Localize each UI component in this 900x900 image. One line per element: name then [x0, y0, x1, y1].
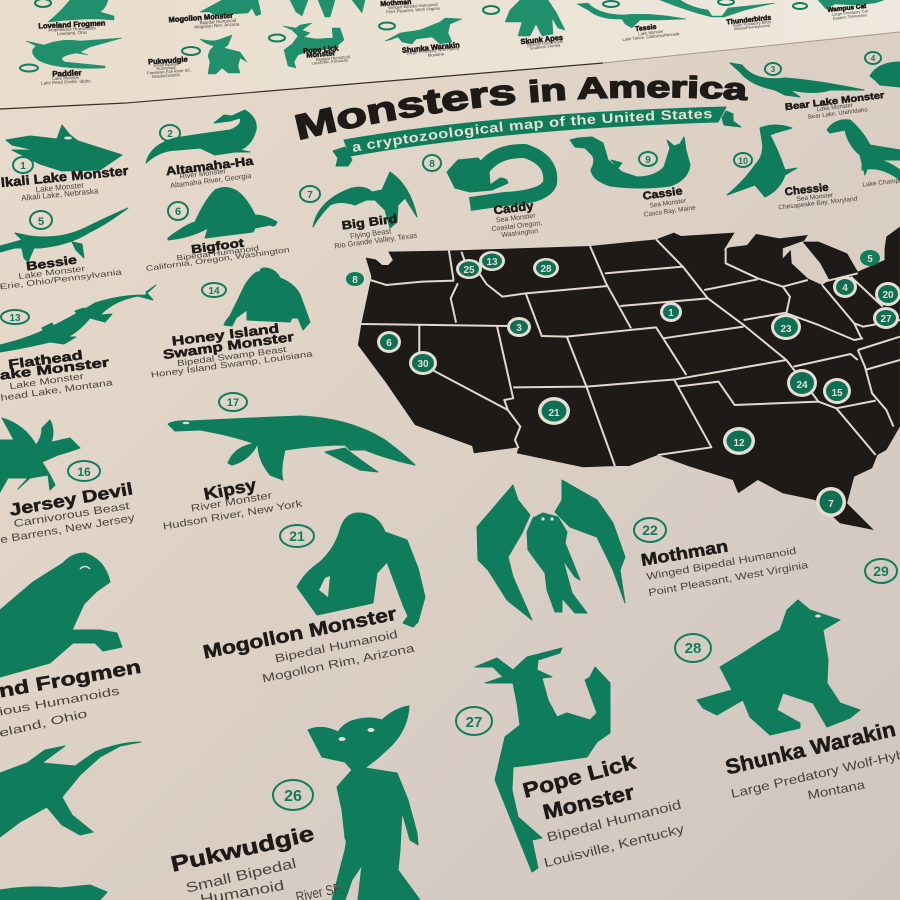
monster 3: Bear Lake Monster: Lake Monster — [816, 103, 853, 113]
title: Monsters in America — [294, 75, 748, 140]
monster: Loveland Frogmen, small — [35, 0, 114, 36]
monster 17: Kipsy: Kipsy — [202, 475, 258, 504]
map markers: 15 — [831, 388, 843, 399]
map markers: 20 — [882, 290, 894, 301]
monster 17: Kipsy: River Monster — [190, 490, 274, 515]
map markers: 3 — [516, 323, 522, 334]
monster 3: Bear Lake Monster: Bear Lake, Utah/Idaho — [808, 107, 869, 121]
monster 7: Big Bird: 7 — [307, 190, 313, 201]
monster 28: Shunka Warakin: Large Predatory Wolf-Hybrid — [730, 743, 900, 801]
monster 27: Pope Lick Monster: Bipedal Humanoid — [545, 797, 683, 845]
monster: Mogollon Monster, small: Bipedal Humanoid — [199, 18, 237, 25]
map markers: 27 — [880, 314, 892, 325]
monster: Pukwudgie, small: Pukwudgie — [148, 55, 188, 66]
map markers: 6 — [386, 338, 392, 349]
monster: Shunka Warakin, small: Montana — [427, 51, 445, 58]
monster 22: Mothman: Mothman — [639, 537, 729, 570]
monster 2: Altamaha-Ha: Altamaha-Ha — [165, 154, 254, 178]
monster 10: Chessie: Chesapeake Bay, Maryland — [778, 195, 858, 211]
monster 26: Pukwudgie: 26 — [284, 788, 302, 805]
map markers: 25 — [463, 265, 475, 276]
monster: Pope Lick Monster, small: Pope Lick — [303, 43, 340, 56]
badge 29: 29 — [873, 563, 889, 579]
monster 25: Paddler — [0, 742, 141, 900]
monster 22: Mothman: Winged Bipedal Humanoid — [646, 546, 797, 583]
map markers: 8 — [352, 275, 358, 286]
monster 1: Alkali Lake Monster: 1 — [20, 161, 26, 172]
monster 20: Loveland Frogmen — [0, 553, 143, 740]
monster 20: Loveland Frogmen: nd Frogmen — [0, 657, 143, 702]
monster: Loveland Frogmen, small: Loveland, Ohio — [57, 30, 88, 36]
monster 3: Bear Lake Monster — [730, 63, 885, 121]
monster 8: Caddy — [423, 151, 550, 239]
monster 14: Honey Island Swamp Monster — [150, 268, 313, 380]
monster 22: Mothman — [477, 480, 810, 620]
monster 17: Kipsy: Hudson River, New York — [162, 498, 304, 533]
monster 26: Pukwudgie: Pukwudgie — [168, 821, 316, 877]
map markers: 7 — [828, 499, 834, 510]
monster 14: Honey Island Swamp Monster: Honey Island Swamp, Louisiana — [150, 348, 313, 380]
monster 9: Cassie: Casco Bay, Maine — [643, 204, 697, 219]
monster: Mogollon Monster, small: Mogollon Monster — [168, 11, 233, 24]
monster 21: Mogollon Monster: Bipedal Humanoid — [274, 629, 399, 665]
monster 1: Alkali Lake Monster: lkali Lake Monster — [0, 163, 129, 190]
monster: Wampus Cat, small: Wampus Cat — [827, 3, 867, 14]
monster 27: Pope Lick Monster: Louisville, Kentucky — [542, 821, 686, 870]
monster 13: Flathead Lake Monster: head Lake, Montana — [0, 377, 113, 403]
monster: Pope Lick Monster, small: Monster — [306, 48, 336, 60]
monster 7: Big Bird: Flying Beast — [350, 226, 393, 241]
monster 10: Chessie: Sea Monster — [796, 192, 834, 203]
map markers: 28 — [540, 264, 552, 275]
monster 13: Flathead Lake Monster: ake Monster — [0, 354, 110, 383]
monster 7: Big Bird: Big Bird — [341, 211, 398, 233]
monster 9: Cassie: Cassie — [642, 185, 683, 203]
map markers: 21 — [548, 408, 560, 419]
monster 8: Caddy: Caddy — [493, 199, 535, 217]
monster: Thunderbirds, small: Giant Predatory Birds — [733, 19, 771, 28]
monster 27: Pope Lick Monster: 27 — [466, 714, 482, 731]
monster: Skunk Apes, small: Bipedal Humanoids — [527, 39, 563, 47]
monster 11: partial serpent and label at right edge — [827, 120, 900, 189]
monster 5: Bessie: Erie, Ohio/Pennsylvania — [0, 267, 123, 291]
monster 2: Altamaha-Ha — [146, 110, 256, 190]
map: United States — [346, 227, 900, 530]
map markers: 23 — [780, 324, 792, 335]
monster 28: Shunka Warakin — [675, 600, 900, 802]
monster 9: Cassie — [570, 137, 697, 219]
monster 5: Bessie: Bessie — [25, 252, 78, 274]
monster 1: Alkali Lake Monster: Lake Monster — [35, 181, 85, 194]
monster: Shunka Warakin, small: Shunka Warakin — [401, 40, 461, 55]
monster 13: Flathead Lake Monster: 13 — [9, 313, 21, 324]
monster 4: partial at right edge — [865, 52, 900, 87]
monster 20: Loveland Frogmen: ious Humanoids — [0, 685, 121, 719]
monster 26: Pukwudgie: Small Bipedal — [184, 855, 298, 896]
monster 10: Chessie — [727, 125, 858, 211]
monster: Pope Lick Monster, small: Bipedal Humanoid — [316, 54, 351, 62]
monster: Paddler, small — [20, 38, 122, 86]
monster 8: Caddy: Coastal Oregon, — [491, 220, 543, 233]
monster 5: Bessie: Lake Monster — [18, 264, 86, 281]
monster: Pope Lick Monster, small: Louisville, Kentucky — [311, 57, 349, 66]
monster 17: Kipsy: 17 — [227, 397, 239, 409]
monster 5: Bessie — [0, 208, 128, 291]
monster 27: Pope Lick Monster — [456, 648, 686, 872]
monster: Pukwudgie, small: Freetown-Fall River SF, — [147, 67, 191, 76]
monster 10: Chessie: 10 — [738, 156, 748, 166]
monster: Wampus Cat, small: Eastern Tennessee — [833, 12, 868, 21]
monster 27: Pope Lick Monster: Monster — [541, 781, 636, 824]
monster: Skunk Apes, small — [483, 0, 565, 51]
monster: Thunderbirds, small: Illinois/Pennsylvania — [734, 23, 771, 31]
monster 21: Mogollon Monster: 21 — [289, 528, 305, 544]
monster: Loveland Frogmen, small: Loveland Frogmen — [38, 18, 106, 31]
monster: Mogollon Monster, small — [168, 0, 261, 30]
monster: Thunderbirds, small: Thunderbirds — [726, 15, 772, 26]
monster: Paddler, small: Lake Monster — [52, 75, 80, 81]
monster 13: Flathead Lake Monster — [0, 285, 156, 403]
monster: Thunderbirds, small — [660, 0, 775, 31]
monster 16: Jersey Devil: Jersey Devil — [8, 479, 134, 520]
monster 16: Jersey Devil: Carnivorous Beast — [13, 500, 130, 530]
monster 17: Kipsy — [162, 393, 415, 533]
banner: subtitle ribbon: a cryptozoological map of the United States — [352, 110, 712, 152]
monster 16: Jersey Devil: e Barrens, New Jersey — [0, 512, 136, 546]
monster 7: Big Bird: Rio Grande Valley, Texas — [334, 231, 418, 250]
map markers: 5 — [867, 254, 873, 265]
monster: Pukwudgie, small: Massachusetts — [152, 72, 180, 79]
monster 1: Alkali Lake Monster: Alkali Lake, Nebraska — [21, 186, 99, 203]
monster 10: Chessie: Chessie — [784, 182, 829, 198]
monster: Shunka Warakin, small: Large Predatory Wolf Hybrid — [406, 45, 460, 56]
monster 21: Mogollon Monster — [201, 513, 425, 685]
monster: Pukwudgie, small: Small Bipedal — [153, 61, 179, 68]
monster 9: Cassie: Sea Monster — [649, 197, 687, 210]
monster 6: Bigfoot: California, Oregon, Washington — [145, 245, 290, 273]
panel: upper poster sheet — [0, 0, 900, 109]
monster 4: partial at right edge: 4 — [871, 54, 876, 63]
monster 14: Honey Island Swamp Monster: 14 — [208, 286, 220, 297]
monster: Paddler, small: Lake Pend Oreille, Idaho — [41, 78, 91, 86]
monster: Shunka Warakin, small — [379, 18, 462, 58]
monster 2: Altamaha-Ha: River Monster — [179, 166, 227, 181]
monster 26: Pukwudgie — [168, 706, 420, 900]
map markers: 4 — [842, 283, 848, 294]
monster 28: Shunka Warakin: Montana — [806, 778, 866, 802]
monster: Wampus Cat, small: Large Predatory Cat — [832, 8, 869, 17]
monster: Pope Lick Monster, small — [269, 23, 351, 68]
monster 16: Jersey Devil: 16 — [77, 465, 91, 479]
monster 6: Bigfoot — [145, 188, 290, 273]
monster 21: Mogollon Monster: Mogollon Monster — [201, 604, 399, 664]
monster: Pukwudgie, small: Humanoid — [156, 65, 176, 71]
monster 8: Caddy: 8 — [429, 159, 435, 170]
monster 28: Shunka Warakin: 28 — [685, 640, 701, 657]
monster: Loveland Frogmen, small: Amphibious Humanoids — [48, 25, 97, 33]
monster: Skunk Apes, small: Southern Florida — [529, 42, 561, 51]
monster 5: Bessie: 5 — [38, 216, 44, 228]
monster 6: Bigfoot: 6 — [175, 206, 181, 218]
monster 3: Bear Lake Monster: 3 — [771, 65, 776, 74]
monster: Tessie, small: Tessie — [635, 24, 657, 33]
monster: Mogollon Monster, small: Mogollon Rim, Arizona — [194, 21, 240, 30]
monster 28: Shunka Warakin: Shunka Warakin — [723, 718, 898, 779]
monster: Pukwudgie, small — [147, 35, 247, 79]
monster: Skunk Apes, small: Skunk Apes — [520, 33, 563, 46]
monster 13: Flathead Lake Monster: Lake Monster — [9, 371, 84, 391]
monster 21: Mogollon Monster: Mogollon Rim, Arizona — [261, 643, 416, 685]
monster: Tessie, small: Lake Monster — [638, 29, 664, 36]
monster: Paddler, small: Paddler — [52, 68, 82, 79]
map markers: 12 — [733, 438, 745, 449]
monster 8: Caddy: Washington — [501, 228, 539, 239]
monster: Tessie, small — [577, 1, 686, 42]
monster 8: Caddy: Sea Monster — [496, 213, 537, 224]
monster 16: Jersey Devil — [0, 418, 136, 546]
monster 22: Mothman: Point Pleasant, West Virginia — [648, 560, 810, 599]
monster 22: Mothman: 22 — [642, 522, 658, 538]
monster: Mothman, small: Winged Bipedal Humanoid — [388, 2, 438, 10]
map markers: 24 — [796, 380, 808, 391]
state borders — [360, 239, 900, 466]
monster 6: Bigfoot: Bipedal Humanoid — [176, 243, 259, 263]
monster 14: Honey Island Swamp Monster: Honey Island — [171, 321, 280, 349]
monster 3: Bear Lake Monster: Bear Lake Monster — [784, 90, 885, 113]
map silhouette — [358, 227, 900, 530]
monster 1: Alkali Lake Monster — [0, 125, 129, 203]
monster 13: Flathead Lake Monster: Flathead — [7, 347, 84, 372]
monster 27: Pope Lick Monster: Pope Lick — [520, 751, 639, 803]
monster 6: Bigfoot: Bigfoot — [190, 236, 245, 256]
map markers: 1 — [668, 308, 674, 319]
monster: Mothman, small: Point Pleasant, West Virginia — [386, 6, 441, 14]
monster 9: Cassie: 9 — [645, 155, 651, 166]
monster 2: Altamaha-Ha: 2 — [167, 129, 173, 140]
map markers: 30 — [417, 359, 429, 370]
monster 2: Altamaha-Ha: Altamaha River, Georgia — [170, 171, 253, 190]
monster: Tessie, small: Lake Tahoe, California/Nevada — [622, 31, 680, 42]
map markers — [346, 250, 900, 517]
monster: Mothman, small — [290, 0, 441, 17]
monster 14: Honey Island Swamp Monster: Swamp Monster — [162, 329, 295, 362]
monster 7: Big Bird — [300, 172, 418, 250]
monster 14: Honey Island Swamp Monster: Bipedal Swamp Beast — [176, 344, 288, 368]
map markers: 13 — [486, 257, 498, 268]
badge 29 — [865, 559, 897, 583]
monster: Wampus Cat, small — [793, 0, 884, 21]
